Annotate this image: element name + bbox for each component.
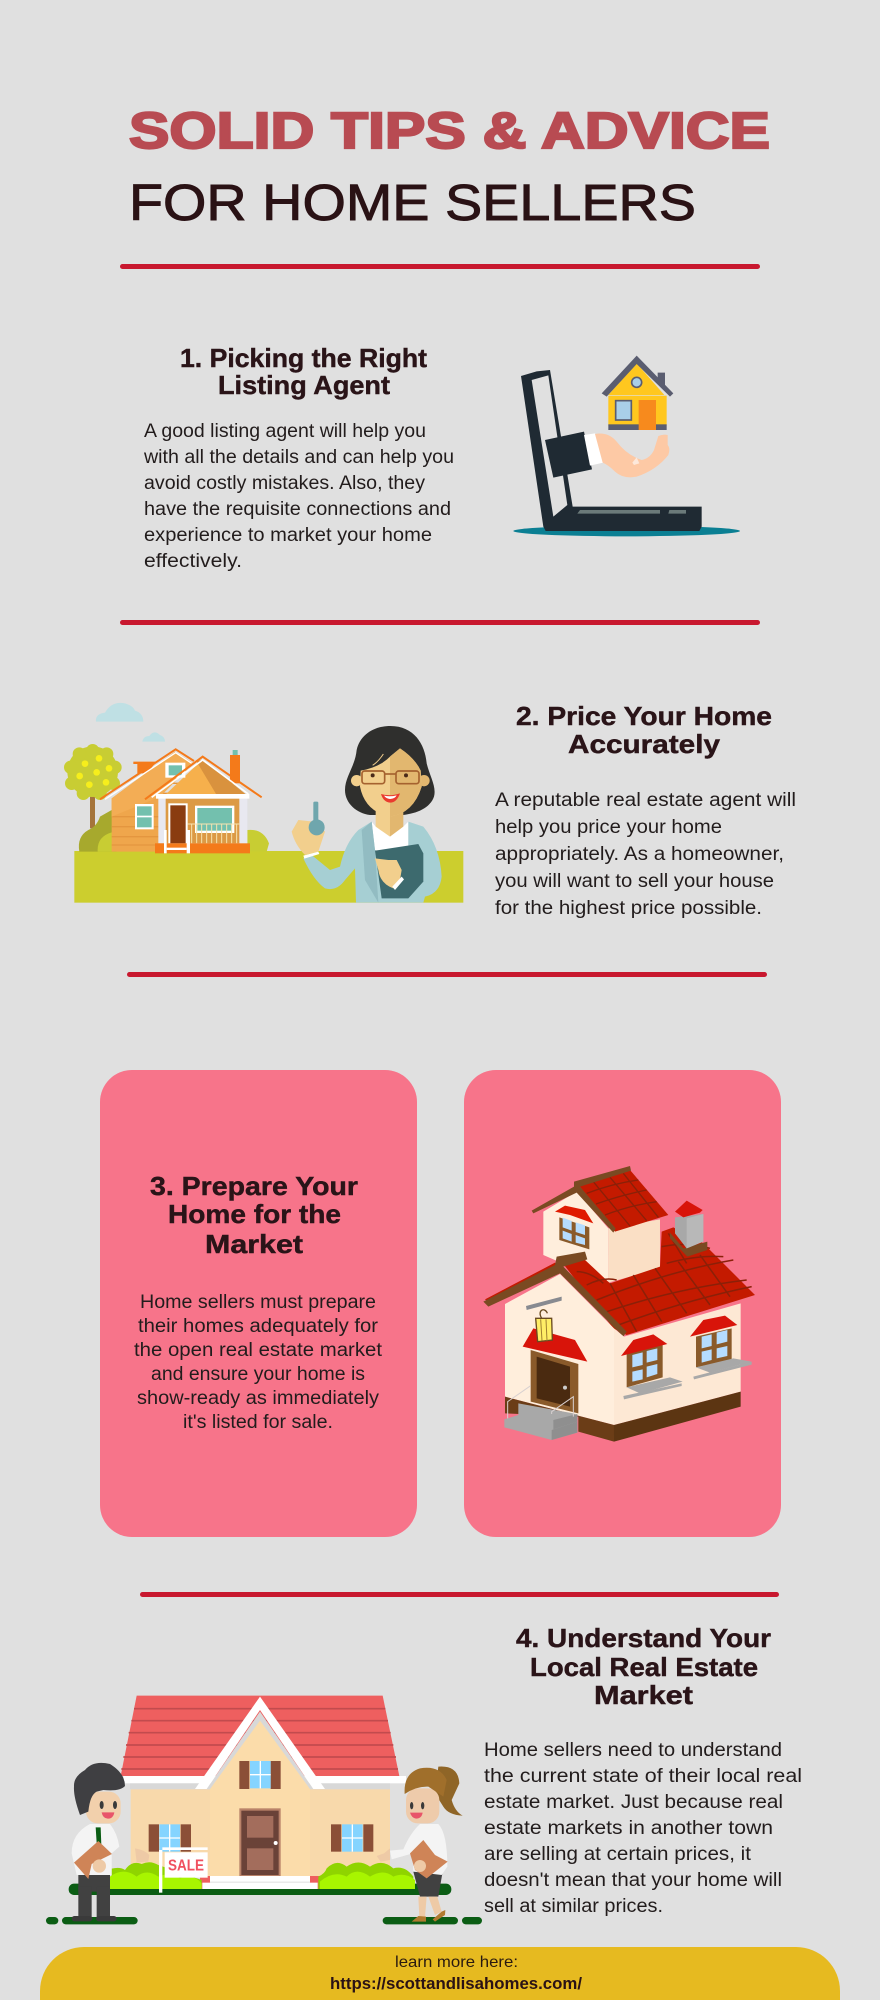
section 1 text: have the requisite connections and (144, 499, 451, 520)
section 2 heading: Accurately (568, 729, 721, 759)
section 3 heading: Market (205, 1229, 303, 1259)
section 2 heading: 2. Price Your Home (516, 701, 772, 731)
section 2 text: for the highest price possible. (495, 898, 762, 919)
section 1 text: with all the details and can help you (143, 447, 454, 468)
footer banner (40, 1947, 840, 2000)
section 1 text: avoid costly mistakes. Also, they (144, 473, 426, 494)
section 1 heading: 1. Picking the Right (180, 343, 427, 373)
section 3 text: the open real estate market (134, 1340, 383, 1361)
panel: section 3 image card (464, 1070, 781, 1537)
section 3 heading: Home for the (168, 1199, 341, 1229)
footer text (330, 1954, 582, 1993)
section 2 heading (516, 701, 772, 759)
title (129, 102, 770, 231)
illustration: arm holding house from a laptop (513, 356, 740, 536)
panel: section 3 text card (100, 1070, 417, 1537)
section 3 text: their homes adequately for (138, 1316, 379, 1337)
footer text: https://scottandlisahomes.com/ (330, 1974, 582, 1993)
section 4 text: doesn't mean that your home will (484, 1870, 782, 1891)
woman figure (292, 726, 442, 903)
section 3 text: it's listed for sale. (183, 1412, 333, 1433)
section 1 text (143, 421, 454, 572)
section 3 heading (150, 1171, 358, 1259)
section 3 text (134, 1292, 383, 1433)
section 4 heading: Market (594, 1680, 693, 1710)
section 1 text: A good listing agent will help you (144, 421, 426, 442)
section 1 heading: Listing Agent (218, 370, 390, 400)
section 2 text: help you price your home (495, 817, 722, 838)
woman figure (377, 1767, 463, 1922)
section 4 text: are selling at certain prices, it (484, 1844, 752, 1865)
section 2 text: A reputable real estate agent will (495, 790, 796, 811)
section 4 text: estate market. Just because real (484, 1792, 783, 1813)
illustration: red-roofed house (483, 1166, 755, 1442)
man figure (72, 1763, 149, 1921)
illustration: agents in front of house with sale sign (46, 1696, 482, 1924)
title: FOR HOME SELLERS (129, 174, 696, 231)
section 4 text: the current state of their local real (484, 1766, 802, 1787)
section 4 text: sell at similar prices. (484, 1896, 663, 1917)
section 4 heading: 4. Understand Your (516, 1623, 771, 1653)
section 3 text: and ensure your home is (151, 1364, 365, 1385)
section 2 text (495, 790, 796, 919)
section 4 text (484, 1740, 802, 1917)
section 1 text: effectively. (144, 551, 242, 572)
footer text: learn more here: (395, 1954, 518, 1971)
section 3 text: show-ready as immediately (137, 1388, 380, 1409)
section 4 text: estate markets in another town (484, 1818, 773, 1839)
section 4 heading: Local Real Estate (530, 1652, 758, 1682)
section 1 text: experience to market your home (144, 525, 432, 546)
sale sign label: SALE (168, 1857, 204, 1874)
illustration: agent with key and house (64, 703, 463, 903)
title: SOLID TIPS & ADVICE (129, 102, 770, 159)
section 1 heading (180, 343, 427, 400)
section 3 heading: 3. Prepare Your (150, 1171, 358, 1201)
section 2 text: you will want to sell your house (495, 871, 774, 892)
section 2 text: appropriately. As a homeowner, (495, 844, 784, 865)
section 3 text: Home sellers must prepare (140, 1292, 376, 1313)
section 4 heading (516, 1623, 771, 1710)
section 4 text: Home sellers need to understand (484, 1740, 782, 1761)
